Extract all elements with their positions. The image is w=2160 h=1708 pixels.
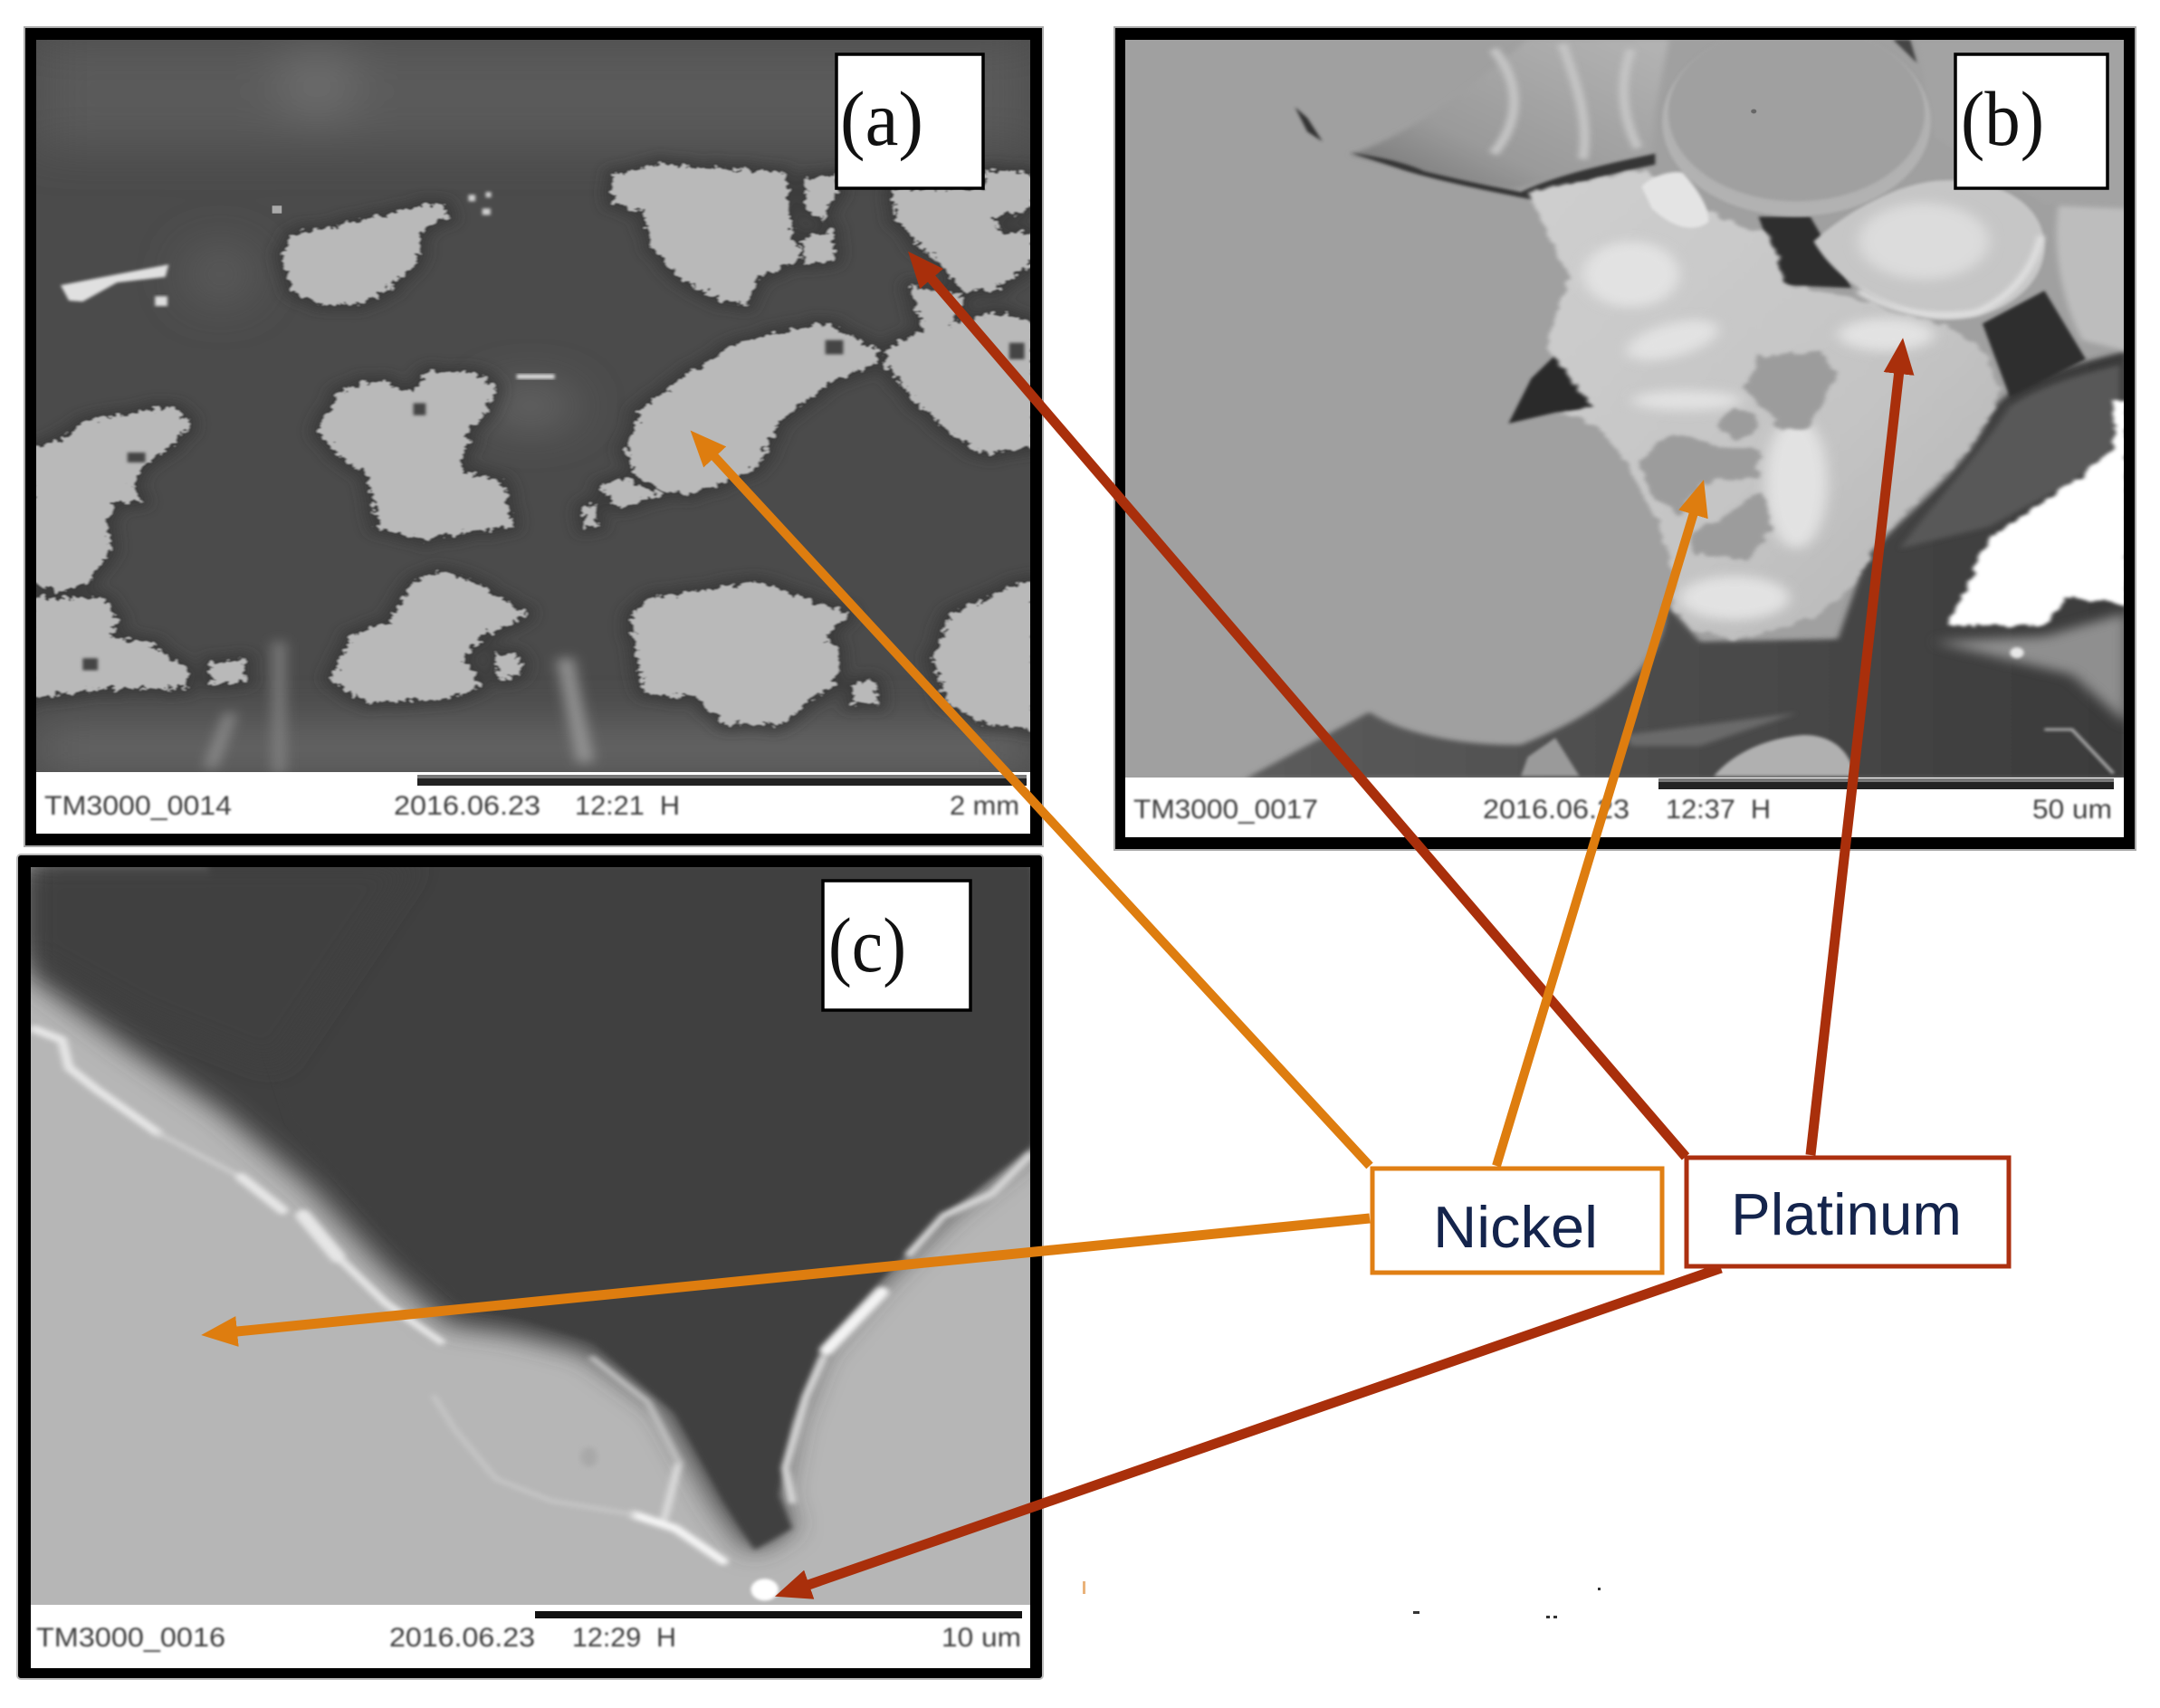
footer (b): 2016.06.23	[1483, 795, 1630, 825]
footer (b): 50 um	[2032, 795, 2112, 825]
arrow: nickel to panel b	[1496, 510, 1695, 1166]
label (a): (a)	[840, 75, 923, 162]
arrow: platinum to panel a	[929, 276, 1686, 1157]
panel: (b) SEM image high magnification	[1114, 24, 2136, 850]
footer (c): 12:29 H	[572, 1623, 676, 1653]
footer (b): TM3000_0017	[1133, 795, 1318, 825]
top crinkled particle	[1350, 40, 1669, 189]
footer (a): 2016.06.23	[394, 791, 540, 821]
nickel patches	[1638, 351, 1838, 559]
arrow: platinum to panel c	[806, 1268, 1721, 1586]
label (a)	[836, 54, 983, 188]
panel: (a) SEM image low magnification	[24, 27, 1043, 846]
footer (c)	[31, 1605, 1030, 1668]
micrograph (c)	[27, 864, 1034, 1608]
footer (b): 12:37 H	[1666, 795, 1771, 825]
label (b)	[1955, 54, 2107, 188]
callout: Platinum: Platinum	[1731, 1181, 1962, 1247]
arrow: nickel to panel a	[712, 454, 1370, 1166]
upper right particle	[1917, 40, 2127, 207]
dark band and charged bright area	[1900, 365, 2120, 549]
footer (a): TM3000_0014	[44, 791, 232, 821]
specks	[1083, 1581, 1601, 1618]
disc particle	[1662, 81, 1931, 218]
callout: Nickel	[1372, 1169, 1662, 1273]
dark background below	[1246, 351, 2127, 779]
micrograph (b)	[1122, 24, 2127, 779]
footer (a): 2 mm	[950, 791, 1019, 821]
callout: Nickel: Nickel	[1433, 1194, 1598, 1260]
label (b): (b)	[1961, 75, 2044, 162]
small lump	[1641, 172, 1708, 228]
arrow: platinum to panel b	[1811, 370, 1899, 1155]
footer (a)	[36, 772, 1030, 834]
arrow: nickel to panel c	[234, 1218, 1370, 1331]
ball particle	[1813, 180, 2044, 320]
label (c)	[823, 881, 970, 1010]
callout: Platinum	[1687, 1158, 2009, 1266]
footer (a): 12:21 H	[575, 791, 680, 821]
footer (c): 2016.06.23	[389, 1623, 535, 1653]
micrograph (a)	[31, 38, 1034, 776]
nickel-coated flakes	[31, 165, 1034, 730]
footer (c): 10 um	[941, 1623, 1021, 1653]
panel: (c) SEM image of particle edge	[17, 854, 1043, 1679]
label (c): (c)	[828, 902, 906, 988]
footer (b)	[1125, 778, 2124, 837]
footer (c): TM3000_0016	[36, 1623, 225, 1653]
bright coated particle	[1528, 170, 1997, 639]
lower particles	[1714, 735, 1855, 776]
far right ball	[2057, 205, 2127, 351]
